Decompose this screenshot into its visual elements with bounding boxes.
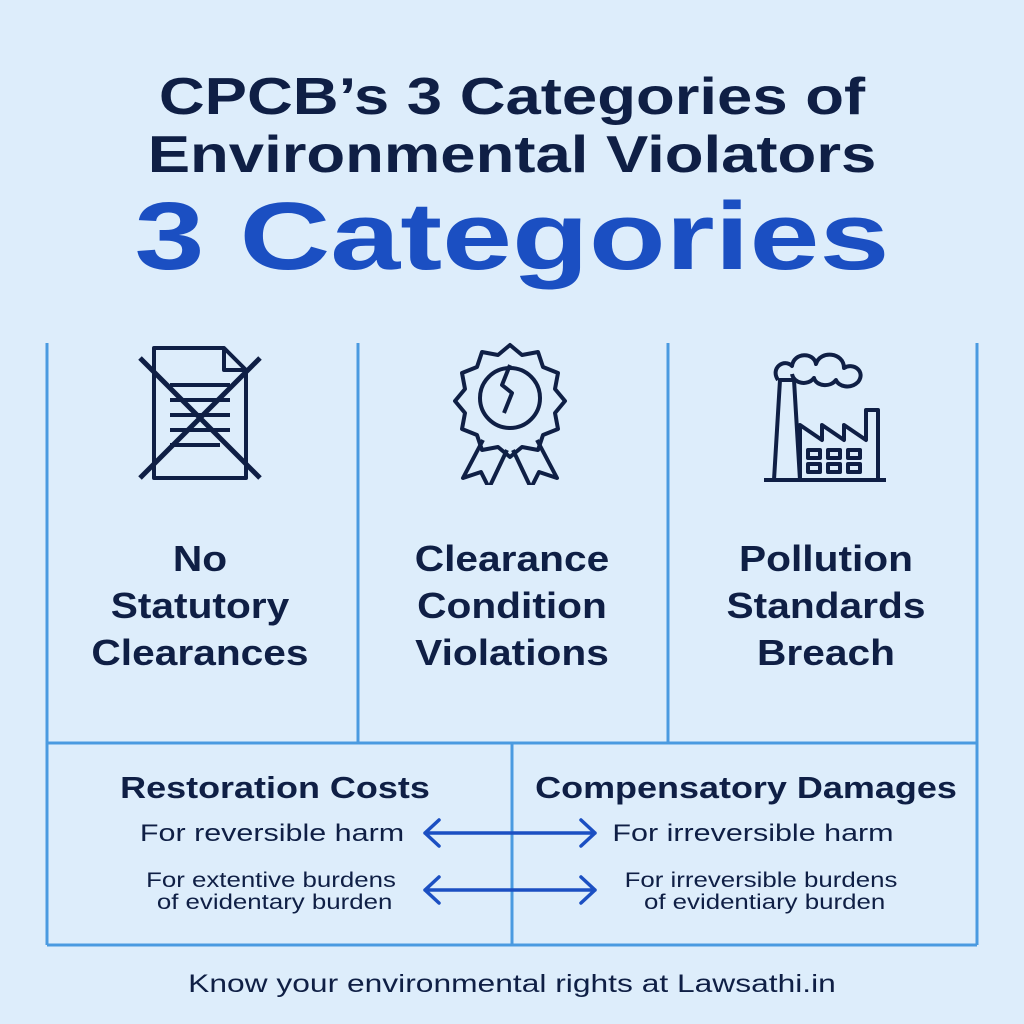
- text: irreversible burdens: [625, 869, 897, 914]
- subtitle: 3 Categories: 3 Categories: [135, 183, 889, 290]
- label: Pollution Standards Breach: Pollution: [739, 538, 913, 579]
- text: irreversible harm: For irreversible harm: [612, 820, 894, 847]
- label: No Statutory Clearances: Statutory: [111, 585, 289, 626]
- text: reversible harm: For reversible harm: [140, 820, 404, 847]
- label: Clearance Condition Violations: Clearance: [415, 538, 609, 579]
- icon: factory: [764, 352, 886, 482]
- label: Clearance Condition Violations: Condition: [417, 585, 607, 626]
- text: irreversible burdens: of evidentiary burden: [644, 891, 885, 914]
- text: extentive burdens: For extentive burdens: [146, 869, 396, 892]
- text: extentive burdens: of evidentary burden: [157, 891, 392, 914]
- footer: Know your environmental rights at Lawsathi.in: [188, 970, 836, 998]
- heading: Restoration Costs: Restoration Costs: [120, 770, 430, 805]
- text: irreversible burdens: For irreversible burdens: [625, 869, 897, 892]
- text: extentive burdens: [146, 869, 396, 914]
- label: Pollution Standards Breach: Standards: [727, 585, 925, 626]
- label: Clearance Condition Violations: [415, 538, 609, 673]
- icon: crossed document: [138, 346, 262, 480]
- arrows: [423, 818, 597, 905]
- label: Clearance Condition Violations: Violations: [415, 632, 609, 673]
- label: No Statutory Clearances: [91, 538, 309, 673]
- title: [148, 68, 876, 184]
- label: Pollution Standards Breach: [727, 538, 925, 673]
- label: Pollution Standards Breach: Breach: [757, 632, 895, 673]
- title: Environmental Violators: [148, 126, 876, 184]
- icon: broken badge: [452, 342, 567, 485]
- label: No Statutory Clearances: No: [173, 538, 227, 579]
- heading: Compensatory Damages: Compensatory Damages: [535, 770, 957, 805]
- label: No Statutory Clearances: Clearances: [91, 632, 309, 673]
- title: CPCB’s 3 Categories of: [159, 68, 865, 126]
